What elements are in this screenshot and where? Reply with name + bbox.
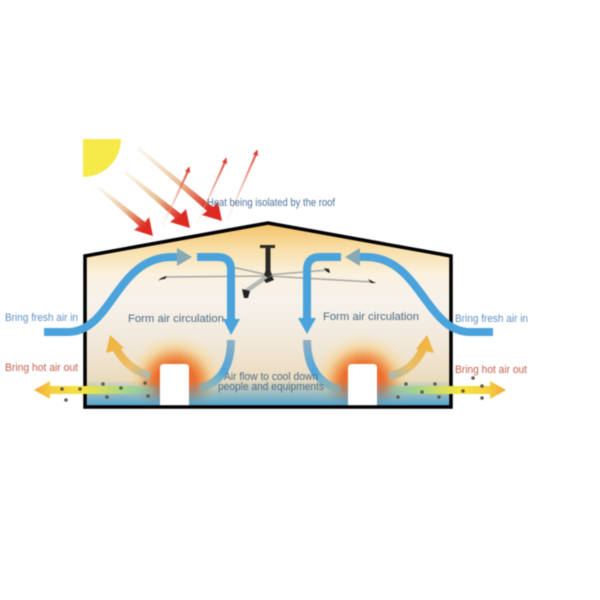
stream: [307, 257, 341, 320]
fan blades: [165, 267, 372, 291]
fresh air arrow right: [345, 248, 493, 332]
cooling stream left: [200, 340, 231, 388]
arrow head: [106, 335, 124, 353]
stream: [197, 257, 231, 320]
warm air arrow left: [106, 335, 150, 376]
stream: [389, 349, 423, 376]
arrow head: [345, 248, 360, 266]
infographic: building ventilation airflow: [5, 138, 528, 410]
label: air flow centre: Air flow to cool down: [224, 371, 318, 383]
door right: [348, 364, 377, 406]
reflected ray 1: [162, 166, 190, 227]
reflected ray 2: [196, 158, 227, 223]
ray 1: [97, 186, 153, 236]
icon: sun: [83, 139, 121, 177]
stream: [116, 348, 150, 376]
ceiling fan: [158, 245, 376, 298]
reflected ray 3: [226, 150, 258, 220]
reflected heat rays: [162, 150, 258, 227]
ray 2: [124, 171, 190, 228]
downward arrow left: [197, 257, 240, 335]
building interior: [85, 223, 451, 407]
arrow head: [298, 318, 316, 334]
downward arrow right: [298, 257, 341, 334]
floor cool air band: [85, 380, 451, 406]
heat glow right: [320, 338, 408, 404]
arrow head: [177, 248, 192, 266]
ray 3: [137, 147, 222, 221]
label: circulation right: Form air circulation: [323, 311, 419, 323]
label: air flow centre: people and equipments: [218, 381, 324, 393]
fresh air arrow left: [44, 248, 192, 332]
blade tips: [158, 268, 376, 298]
particles left: [60, 381, 150, 402]
door left: [160, 364, 189, 406]
label: fresh air right: Bring fresh air in: [455, 313, 528, 325]
hot air out arrow right: [388, 381, 506, 399]
arrow head: [223, 319, 240, 335]
roof heat label: Heat being isolated by the roof: [207, 197, 336, 209]
incoming sun rays: [97, 147, 222, 236]
particles right: [396, 376, 484, 400]
fan mount: [260, 245, 275, 278]
hot air out arrow left: [34, 381, 155, 399]
wall gradient: [85, 223, 451, 407]
label: hot air left: Bring hot air out: [5, 362, 78, 374]
warm air arrow right: [389, 335, 434, 376]
building outline: [85, 223, 451, 407]
label: fresh air left: Bring fresh air in: [5, 312, 78, 324]
heat glow left: [130, 338, 218, 404]
label: air flow centre: [218, 371, 324, 393]
curved air stream: [44, 257, 178, 332]
label: hot air right: Bring hot air out: [455, 364, 527, 376]
arrow head: [416, 335, 434, 353]
cooling stream right: [307, 340, 340, 390]
label: circulation left: Form air circulation: [128, 313, 224, 325]
curved air stream: [358, 257, 493, 332]
